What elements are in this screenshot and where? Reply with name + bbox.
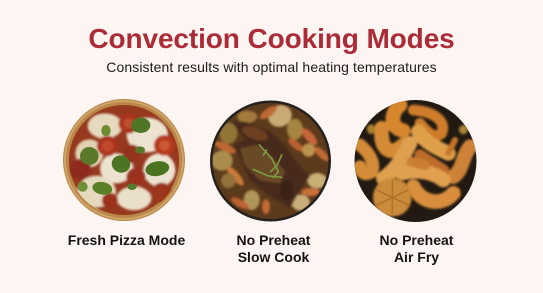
icon: pizza (63, 99, 185, 221)
grilled lemon (373, 178, 412, 217)
label: no preheat slow cook: Slow Cook (238, 249, 309, 265)
label: no preheat slow cook: No Preheat (237, 232, 310, 248)
label: no preheat air fry (380, 232, 454, 265)
food photo illustrations (63, 99, 476, 222)
label: no preheat air fry: Air Fry (394, 249, 439, 265)
subtitle: Consistent results with optimal heating temperatures (106, 59, 437, 75)
label: fresh pizza mode: Fresh Pizza Mode (68, 232, 185, 248)
icon: air fried shrimp (354, 100, 476, 222)
label: no preheat air fry: No Preheat (380, 232, 453, 248)
label: no preheat slow cook (237, 232, 310, 265)
title: Convection Cooking Modes (88, 23, 455, 54)
icon: slow cooked roast in pot (210, 100, 331, 222)
